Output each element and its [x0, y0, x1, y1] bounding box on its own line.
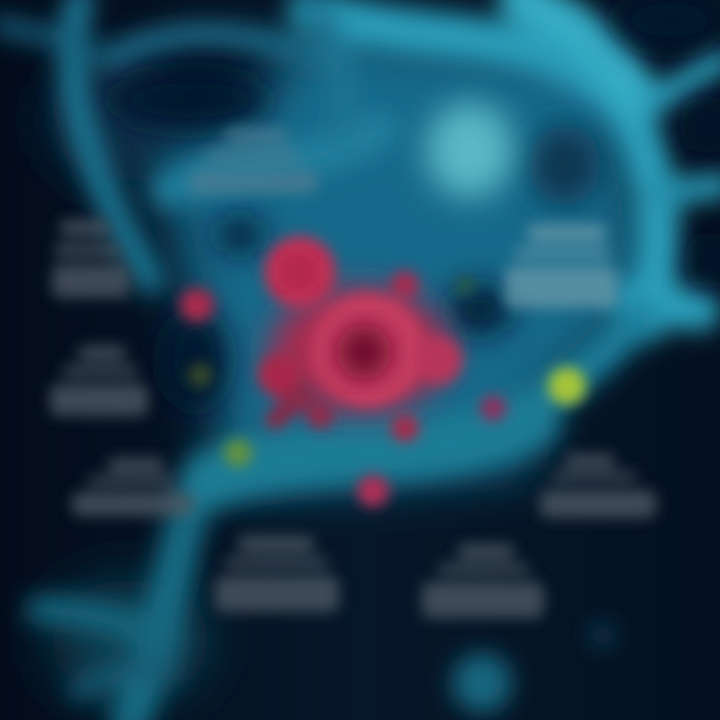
- particle: olive left: [189, 364, 211, 386]
- text block: right upper: [505, 224, 617, 308]
- small particles: [180, 276, 586, 507]
- lobe core: [284, 258, 312, 286]
- red spikes and lobes: [258, 236, 462, 442]
- text block: top centre: [190, 128, 318, 194]
- particle: red left: [180, 288, 214, 322]
- dark vacuoles: [110, 0, 720, 408]
- grey text blocks: [50, 128, 656, 618]
- particle: pink right: [480, 395, 506, 421]
- particle: green lower left: [224, 439, 252, 467]
- red glow: [270, 288, 450, 412]
- nucleus: [426, 102, 514, 198]
- virus core: [337, 325, 391, 379]
- particle: yellow-green large: [548, 367, 586, 405]
- text block: bottom left: [215, 536, 339, 612]
- particle: red bottom: [357, 475, 389, 507]
- particle: olive top right: [456, 276, 474, 294]
- text block: left middle: [50, 346, 148, 416]
- text block: left upper: [52, 220, 130, 298]
- red virus cluster: [258, 236, 462, 442]
- text block: left lower: [72, 458, 194, 516]
- text block: bottom right: [422, 544, 544, 618]
- text block: right lower: [540, 454, 656, 518]
- cell body glow: [50, 30, 650, 700]
- bottom teal blobs: [452, 622, 615, 713]
